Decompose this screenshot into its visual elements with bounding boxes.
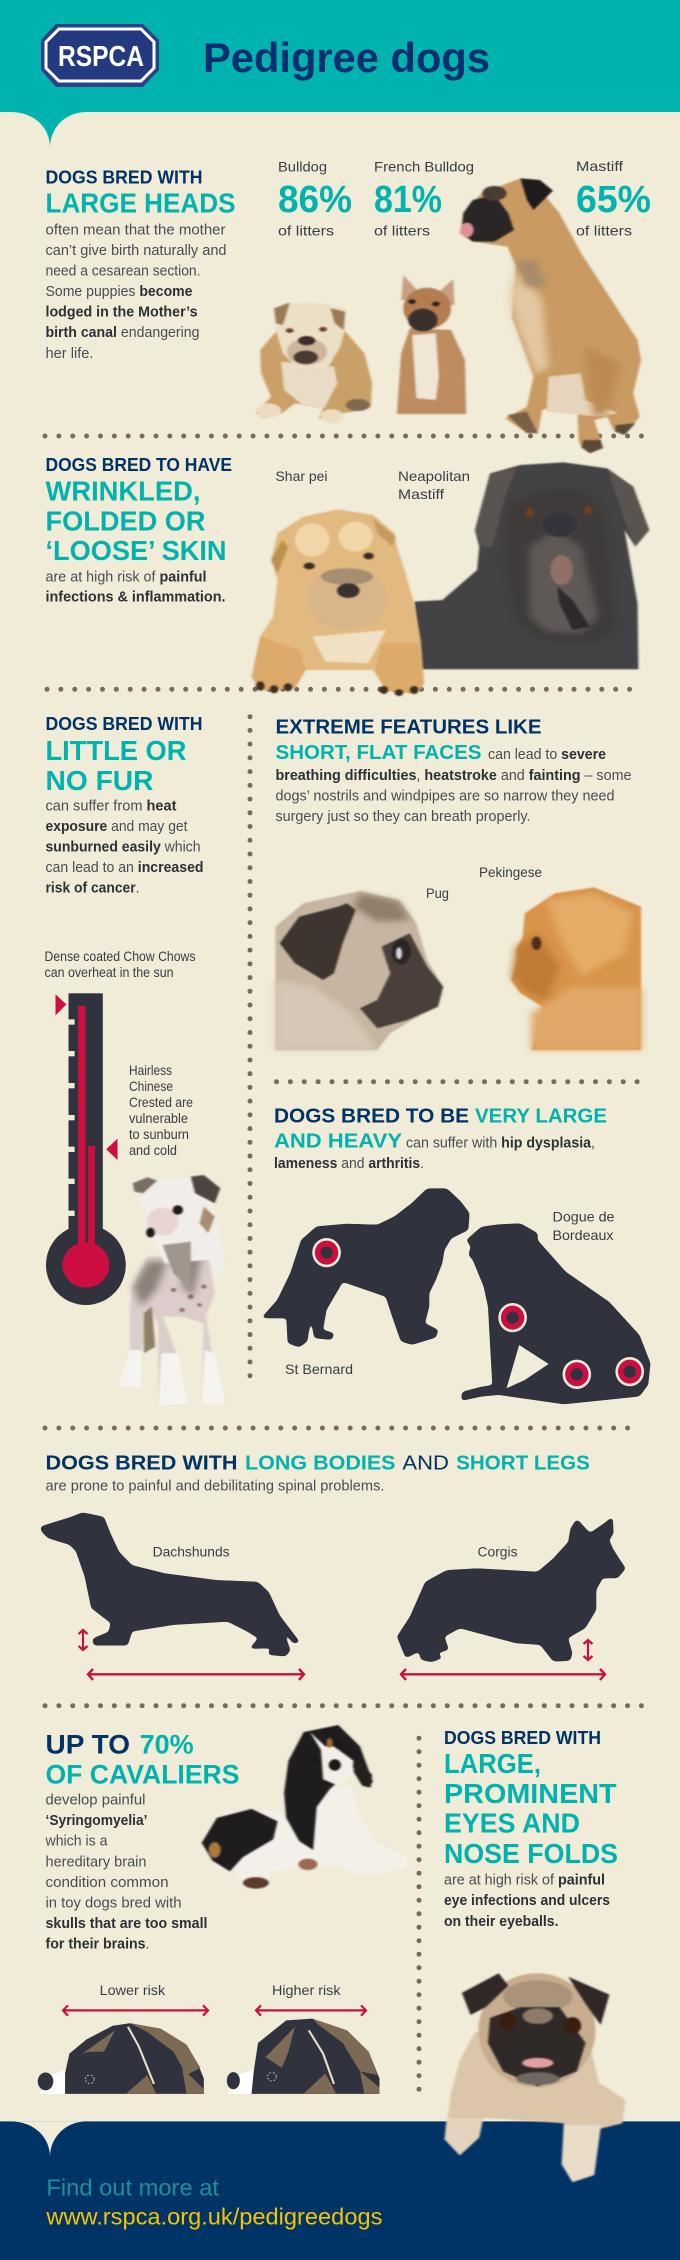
- heading: dogs bred to have: DOGS BRED TO HAVE: [46, 454, 232, 475]
- stat: french bulldog 81%: French Bulldog: [374, 159, 474, 175]
- arrow: dachshund length: [88, 1669, 304, 1680]
- body text: syringomyelia: which is a: [45, 1834, 108, 1850]
- heading: long bodies and short legs: DOGS BRED WITH: [46, 1451, 238, 1474]
- body text: syringomyelia: ‘Syringomyelia’: [46, 1813, 148, 1829]
- body text: fur: risk of cancer.: [46, 880, 140, 896]
- label: lower risk: Lower risk: [100, 1982, 166, 1998]
- silhouette: st bernard: [263, 1189, 469, 1347]
- panel: prominent eyes text: [444, 1727, 618, 1930]
- body text: short flat faces: [276, 747, 632, 825]
- joint markers: [498, 1303, 644, 1389]
- stat: bulldog 86%: Bulldog: [278, 159, 327, 175]
- label: neapolitan mastiff: Neapolitan: [398, 468, 470, 484]
- arrow: dachshund leg height: [78, 1630, 88, 1650]
- heading: large prominent eyes and nose folds: NOSE FOLDS: [444, 1838, 618, 1869]
- photo: bulldog: [256, 303, 372, 423]
- stat: bulldog 86%: [278, 159, 352, 238]
- body text: large heads: birth canal endangering: [46, 325, 200, 341]
- body text: syringomyelia: in toy dogs bred with: [46, 1895, 182, 1911]
- heading: short flat faces: SHORT, FLAT FACES: [276, 741, 482, 764]
- label: st bernard: St Bernard: [285, 1361, 353, 1377]
- label: higher risk: Higher risk: [272, 1982, 342, 1998]
- body text: very large: can suffer with hip dysplasia,: [406, 1135, 595, 1151]
- photo: pug side view: [275, 891, 443, 1050]
- body text: eye risk: on their eyeballs.: [444, 1914, 558, 1930]
- body text: eye risk: are at high risk of painful: [444, 1873, 605, 1889]
- panel: long bodies text: [46, 1451, 590, 1495]
- body text: large heads: can’t give birth naturally and: [46, 243, 226, 259]
- label: dogue de bordeaux: Bordeaux: [552, 1227, 614, 1243]
- arrow: lower risk skull width: [63, 2005, 208, 2016]
- joint marker: [312, 1238, 341, 1267]
- heading: up to 70% of cavaliers: 70%: [140, 1730, 194, 1760]
- caption: chow chows: can overheat in the sun: [44, 964, 174, 980]
- thermometer: [46, 993, 126, 1305]
- body text: fur: can suffer from heat: [46, 799, 177, 815]
- label: shar pei: Shar pei: [276, 468, 328, 484]
- photo: mastiff: [460, 178, 641, 453]
- caption: hairless chinese crested: [129, 1062, 193, 1158]
- heading: large prominent eyes and nose folds: EYES AND: [444, 1808, 580, 1838]
- body text: skin risk: [46, 570, 226, 606]
- body text: fur: [46, 799, 204, 896]
- body text: fur: exposure and may get: [46, 819, 188, 835]
- arrow: corgi length: [401, 1669, 605, 1680]
- body text: short flat faces: can lead to severe: [488, 747, 606, 763]
- silhouette: dachshund: [41, 1513, 299, 1656]
- body text: large heads: her life.: [46, 346, 94, 362]
- label: pug: Pug: [426, 885, 449, 901]
- label: dachshunds: Dachshunds: [153, 1544, 230, 1560]
- label: dogue de bordeaux: [552, 1209, 615, 1243]
- heading: long bodies and short legs: SHORT LEGS: [456, 1451, 590, 1474]
- footer call to action: Find out more at: [46, 2175, 219, 2201]
- photo: pug front: [445, 1973, 625, 2182]
- label: neapolitan mastiff: Mastiff: [398, 486, 444, 502]
- body text: fur: sunburned easily which: [46, 840, 200, 856]
- heading: long bodies and short legs: LONG BODIES: [245, 1451, 396, 1474]
- panel: very large and heavy text: [274, 1104, 607, 1172]
- silhouette: corgi: [397, 1517, 625, 1662]
- heading: very large and heavy: [274, 1104, 607, 1152]
- body text: large heads: often mean that the mother: [46, 222, 226, 238]
- caption: hairless chinese crested: Crested are: [129, 1094, 193, 1110]
- panel: little or no fur text: [46, 713, 204, 896]
- heading: wrinkled folded loose skin: ‘LOOSE’ SKIN: [46, 535, 226, 566]
- body text: large heads: Some puppies become: [46, 284, 192, 300]
- stat: bulldog 86%: 86%: [278, 179, 352, 221]
- photo: cavalier: [202, 1725, 408, 1889]
- caption: hairless chinese crested: vulnerable: [129, 1110, 188, 1126]
- photo: french bulldog: [397, 275, 466, 414]
- arrow: higher risk skull width: [256, 2005, 366, 2016]
- body text: very large: lameness and arthritis.: [274, 1156, 424, 1172]
- photo: chinese crested: [117, 1175, 226, 1406]
- heading: very large and heavy: AND HEAVY: [274, 1129, 402, 1152]
- arrow: corgi leg height: [584, 1640, 592, 1660]
- caption: chow chows: Dense coated Chow Chows: [44, 948, 196, 964]
- body text: large heads: need a cesarean section.: [46, 264, 200, 280]
- heading: very large and heavy: DOGS BRED TO BE: [274, 1104, 469, 1127]
- stat: mastiff 65%: [576, 158, 651, 238]
- label: dogue de bordeaux: Dogue de: [552, 1209, 615, 1225]
- heading: dogs bred with: DOGS BRED WITH: [46, 713, 202, 734]
- title: Pedigree dogs: [203, 34, 490, 81]
- panel: short flat faces text: [276, 715, 632, 825]
- heading: wrinkled folded loose skin: WRINKLED,: [46, 476, 200, 507]
- body text: very large: [274, 1135, 595, 1172]
- stat: mastiff 65%: 65%: [576, 179, 651, 221]
- body text: syringomyelia: condition common: [46, 1875, 168, 1891]
- stat: mastiff 65%: of litters: [576, 222, 632, 238]
- heading: large prominent eyes and nose folds: PROMINENT: [444, 1778, 617, 1809]
- heading: dogs bred with: DOGS BRED WITH: [46, 166, 202, 187]
- body text: large heads: [46, 222, 226, 362]
- heading: dogs bred with: DOGS BRED WITH: [444, 1727, 601, 1748]
- panel: cavaliers text: [45, 1730, 239, 1953]
- caption: hairless chinese crested: to sunburn: [129, 1126, 189, 1142]
- silhouette: dogue de bordeaux: [461, 1224, 650, 1404]
- heading: little or no fur: LITTLE OR: [46, 735, 187, 766]
- body text: syringomyelia: for their brains.: [46, 1937, 149, 1953]
- photo: neapolitan mastiff: [414, 462, 649, 669]
- heading: wrinkled folded loose skin: FOLDED OR: [46, 506, 206, 537]
- heading: long bodies and short legs: [46, 1451, 590, 1474]
- body text: fur: can lead to an increased: [46, 860, 204, 876]
- stat: french bulldog 81%: [374, 159, 474, 238]
- panel: wrinkled skin text: [46, 454, 232, 606]
- panel: large heads text: [46, 166, 236, 362]
- label: corgis: Corgis: [478, 1544, 518, 1560]
- heading: long bodies and short legs: AND: [402, 1451, 449, 1474]
- body text: skin risk: are at high risk of painful: [46, 570, 206, 586]
- label: neapolitan mastiff: [398, 468, 470, 502]
- body text: eye risk: [444, 1873, 610, 1930]
- photo: shar pei: [252, 509, 424, 696]
- logo: RSPCA: [41, 24, 159, 87]
- caption: hairless chinese crested: Hairless: [129, 1062, 172, 1078]
- heading: wrinkled folded loose skin: [46, 476, 226, 566]
- body text: spinal problems: are prone to painful and debilitating spinal problems.: [46, 1479, 385, 1495]
- caption: hairless chinese crested: Chinese: [129, 1078, 173, 1094]
- stat: french bulldog 81%: 81%: [374, 179, 442, 221]
- heading: large prominent eyes and nose folds: LARGE,: [444, 1748, 541, 1779]
- heading: very large and heavy: VERY LARGE: [475, 1104, 607, 1127]
- body text: short flat faces: breathing difficulties, heatstroke and fainting – some: [276, 768, 632, 784]
- header band: [0, 0, 680, 148]
- heading: large prominent eyes and nose folds: [444, 1748, 618, 1869]
- stat: french bulldog 81%: of litters: [374, 222, 430, 238]
- body text: large heads: lodged in the Mother’s: [46, 305, 198, 321]
- heading: little or no fur: [46, 735, 187, 796]
- body text: syringomyelia: develop painful: [46, 1793, 146, 1809]
- caption: hairless chinese crested: and cold: [129, 1142, 177, 1158]
- logo: RSPCA: RSPCA: [58, 41, 144, 73]
- heading: large heads: LARGE HEADS: [46, 188, 236, 219]
- illustration: lower risk head: [38, 2023, 204, 2094]
- body text: short flat faces: surgery just so they can breath properly.: [276, 809, 530, 825]
- heading: up to 70% of cavaliers: UP TO: [46, 1730, 130, 1760]
- body text: short flat faces: dogs’ nostrils and windpipes are so narrow they need: [276, 789, 614, 805]
- stat: bulldog 86%: of litters: [278, 222, 334, 238]
- body text: syringomyelia: skulls that are too small: [46, 1916, 208, 1932]
- stat: mastiff 65%: Mastiff: [576, 158, 623, 174]
- illustration: higher risk head: [227, 2019, 379, 2094]
- footer band: [0, 2121, 680, 2260]
- label: pekingese: Pekingese: [479, 864, 542, 880]
- heading: little or no fur: NO FUR: [46, 765, 154, 796]
- footer url: www.rspca.org.uk/pedigreedogs: [45, 2203, 382, 2229]
- heading: extreme features: EXTREME FEATURES LIKE: [276, 715, 542, 738]
- photo: pekingese: [511, 887, 641, 1050]
- heading: up to 70% of cavaliers: OF CAVALIERS: [46, 1760, 240, 1790]
- caption: chow chows: [44, 948, 196, 980]
- body text: syringomyelia: [45, 1793, 207, 1953]
- body text: skin risk: infections & inflammation.: [46, 590, 226, 606]
- body text: syringomyelia: hereditary brain: [46, 1854, 146, 1870]
- body text: eye risk: eye infections and ulcers: [444, 1893, 610, 1909]
- heading: up to 70% of cavaliers: [46, 1730, 240, 1790]
